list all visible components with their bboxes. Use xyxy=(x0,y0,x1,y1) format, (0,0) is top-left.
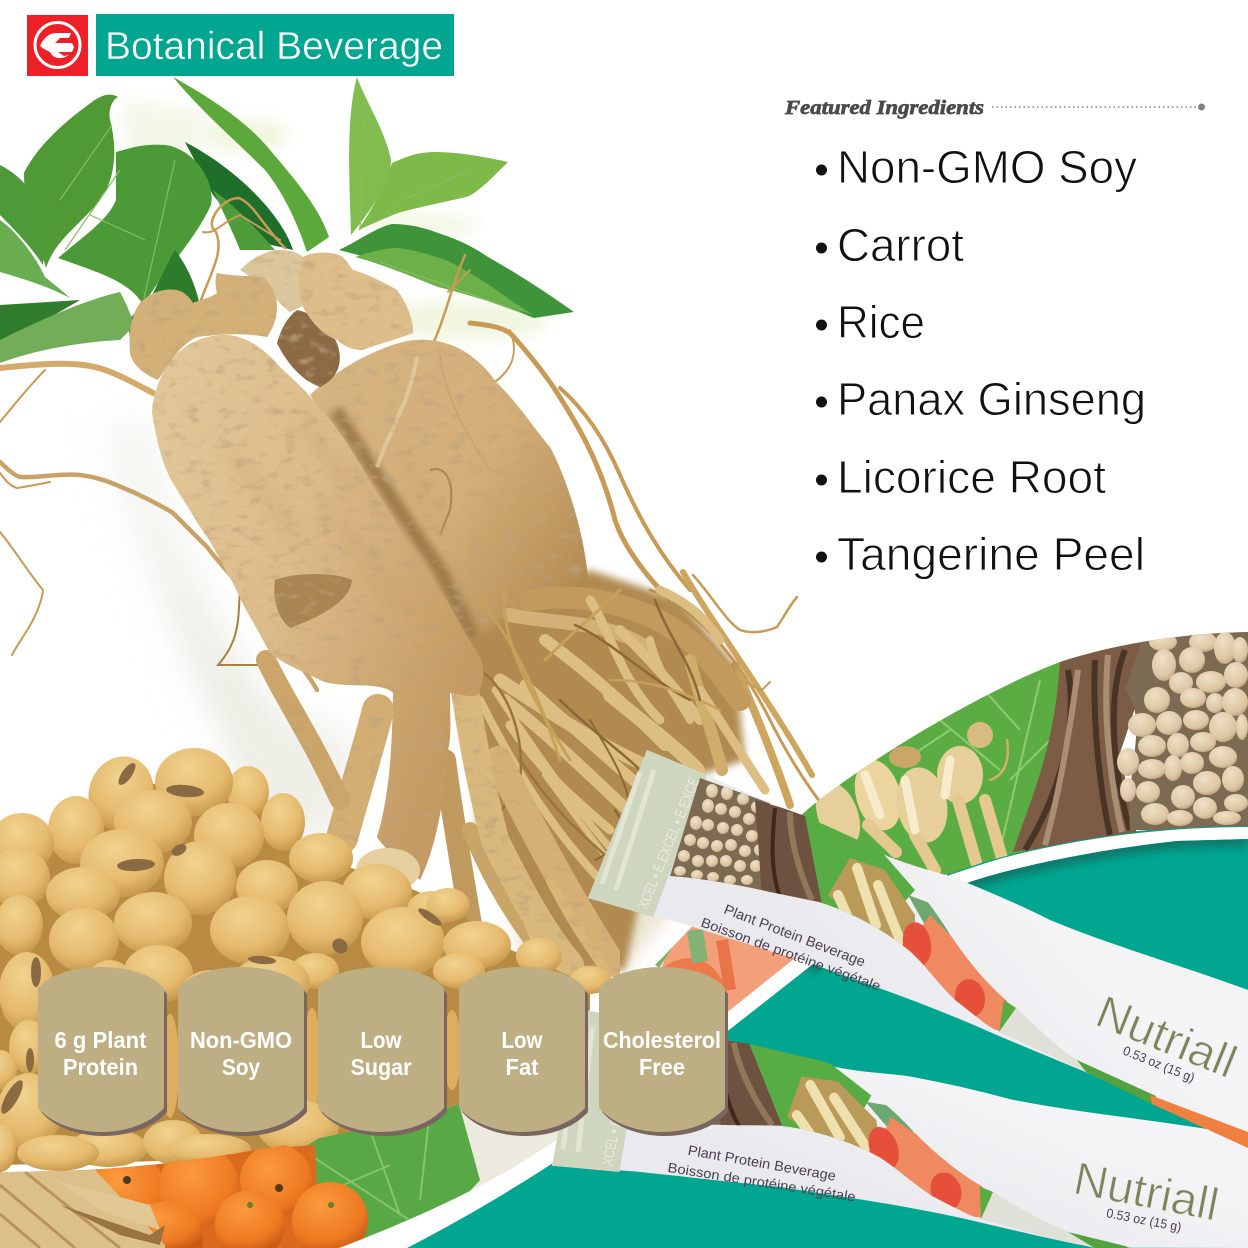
photo: ginseng leaves xyxy=(0,77,574,363)
rice and leaf picture end, lower xyxy=(981,1192,1130,1248)
benefit badges row xyxy=(38,967,728,1136)
licorice sticks xyxy=(0,1170,165,1248)
featured ingredients heading: Featured Ingredients xyxy=(784,97,984,119)
item: Rice: Rice xyxy=(837,296,925,348)
sachet: upper xyxy=(588,750,1248,1148)
sachet label: lower: Nutriall xyxy=(1070,1152,1223,1231)
soybeans, pale xyxy=(1117,632,1248,830)
photo: fine root hairs, rear xyxy=(0,198,830,815)
item: Non-GMO Soy: Non-GMO Soy xyxy=(837,141,1137,193)
carrots xyxy=(655,926,794,1012)
photo: ginseng root, front xyxy=(130,273,620,977)
featured ingredients heading xyxy=(784,97,1205,119)
sachet: lower xyxy=(524,984,1248,1248)
oranges xyxy=(60,1144,368,1248)
badge: Cholesterol Free: Free xyxy=(639,1054,685,1080)
ingredient photo strip xyxy=(0,632,1248,1248)
badge: Low Sugar: Sugar xyxy=(350,1054,412,1080)
badge: 6 g Plant Protein xyxy=(38,967,167,1136)
badge: 6 g Plant Protein: Protein xyxy=(63,1054,138,1080)
sachet label: upper: Boisson de protéine végétale xyxy=(699,915,883,994)
badge: 6 g Plant Protein: 6 g Plant xyxy=(54,1027,147,1053)
item: Carrot: Carrot xyxy=(837,219,964,271)
rice xyxy=(448,1104,558,1191)
ingredients list xyxy=(816,141,1146,580)
badge: Cholesterol Free: Cholesterol xyxy=(603,1027,721,1053)
sachet label: lower xyxy=(667,1142,1223,1234)
sachet label: upper xyxy=(699,901,1244,1088)
photo: soybeans pile xyxy=(0,748,611,1172)
sachet label: lower: Plant Protein Beverage xyxy=(687,1142,837,1184)
badge: Low Fat xyxy=(459,967,588,1136)
title banner: Botanical Beverage xyxy=(105,25,443,68)
badge: Low Fat: Fat xyxy=(506,1054,539,1080)
soft background shadow xyxy=(115,100,680,965)
sachet label: lower: 0.53 oz (15 g) xyxy=(1105,1205,1183,1234)
badge: Low Fat: Low xyxy=(502,1027,543,1053)
sachet label: lower: Boisson de protéine végétale xyxy=(667,1160,857,1204)
item: Panax Ginseng: Panax Ginseng xyxy=(837,373,1146,425)
licorice bark xyxy=(1013,638,1150,852)
sachet label: upper: Nutriall xyxy=(1089,985,1244,1088)
badge: Low Sugar xyxy=(318,967,447,1136)
badge: Non-GMO Soy: Non-GMO xyxy=(190,1027,292,1053)
bottom right teal swoosh with white band xyxy=(395,826,1248,1248)
badge: Non-GMO Soy xyxy=(178,967,307,1136)
photo: dense root mass xyxy=(470,570,765,970)
ginseng on leaf xyxy=(802,658,1070,875)
badge: Low Sugar: Low xyxy=(360,1027,402,1053)
title banner xyxy=(96,14,454,76)
photo: ginseng root, back xyxy=(240,250,590,650)
item: Tangerine Peel: Tangerine Peel xyxy=(837,528,1145,580)
badge: Non-GMO Soy: Soy xyxy=(222,1054,260,1080)
rice, leaf and orange picture end, upper xyxy=(999,1008,1248,1148)
badge: Cholesterol Free xyxy=(599,967,728,1136)
item: Licorice Root: Licorice Root xyxy=(837,451,1106,503)
leaf, lower xyxy=(306,1104,480,1246)
logo xyxy=(27,15,88,76)
sachet label: upper: 0.53 oz (15 g) xyxy=(1121,1043,1197,1085)
sachet label: upper: Plant Protein Beverage xyxy=(722,901,868,970)
